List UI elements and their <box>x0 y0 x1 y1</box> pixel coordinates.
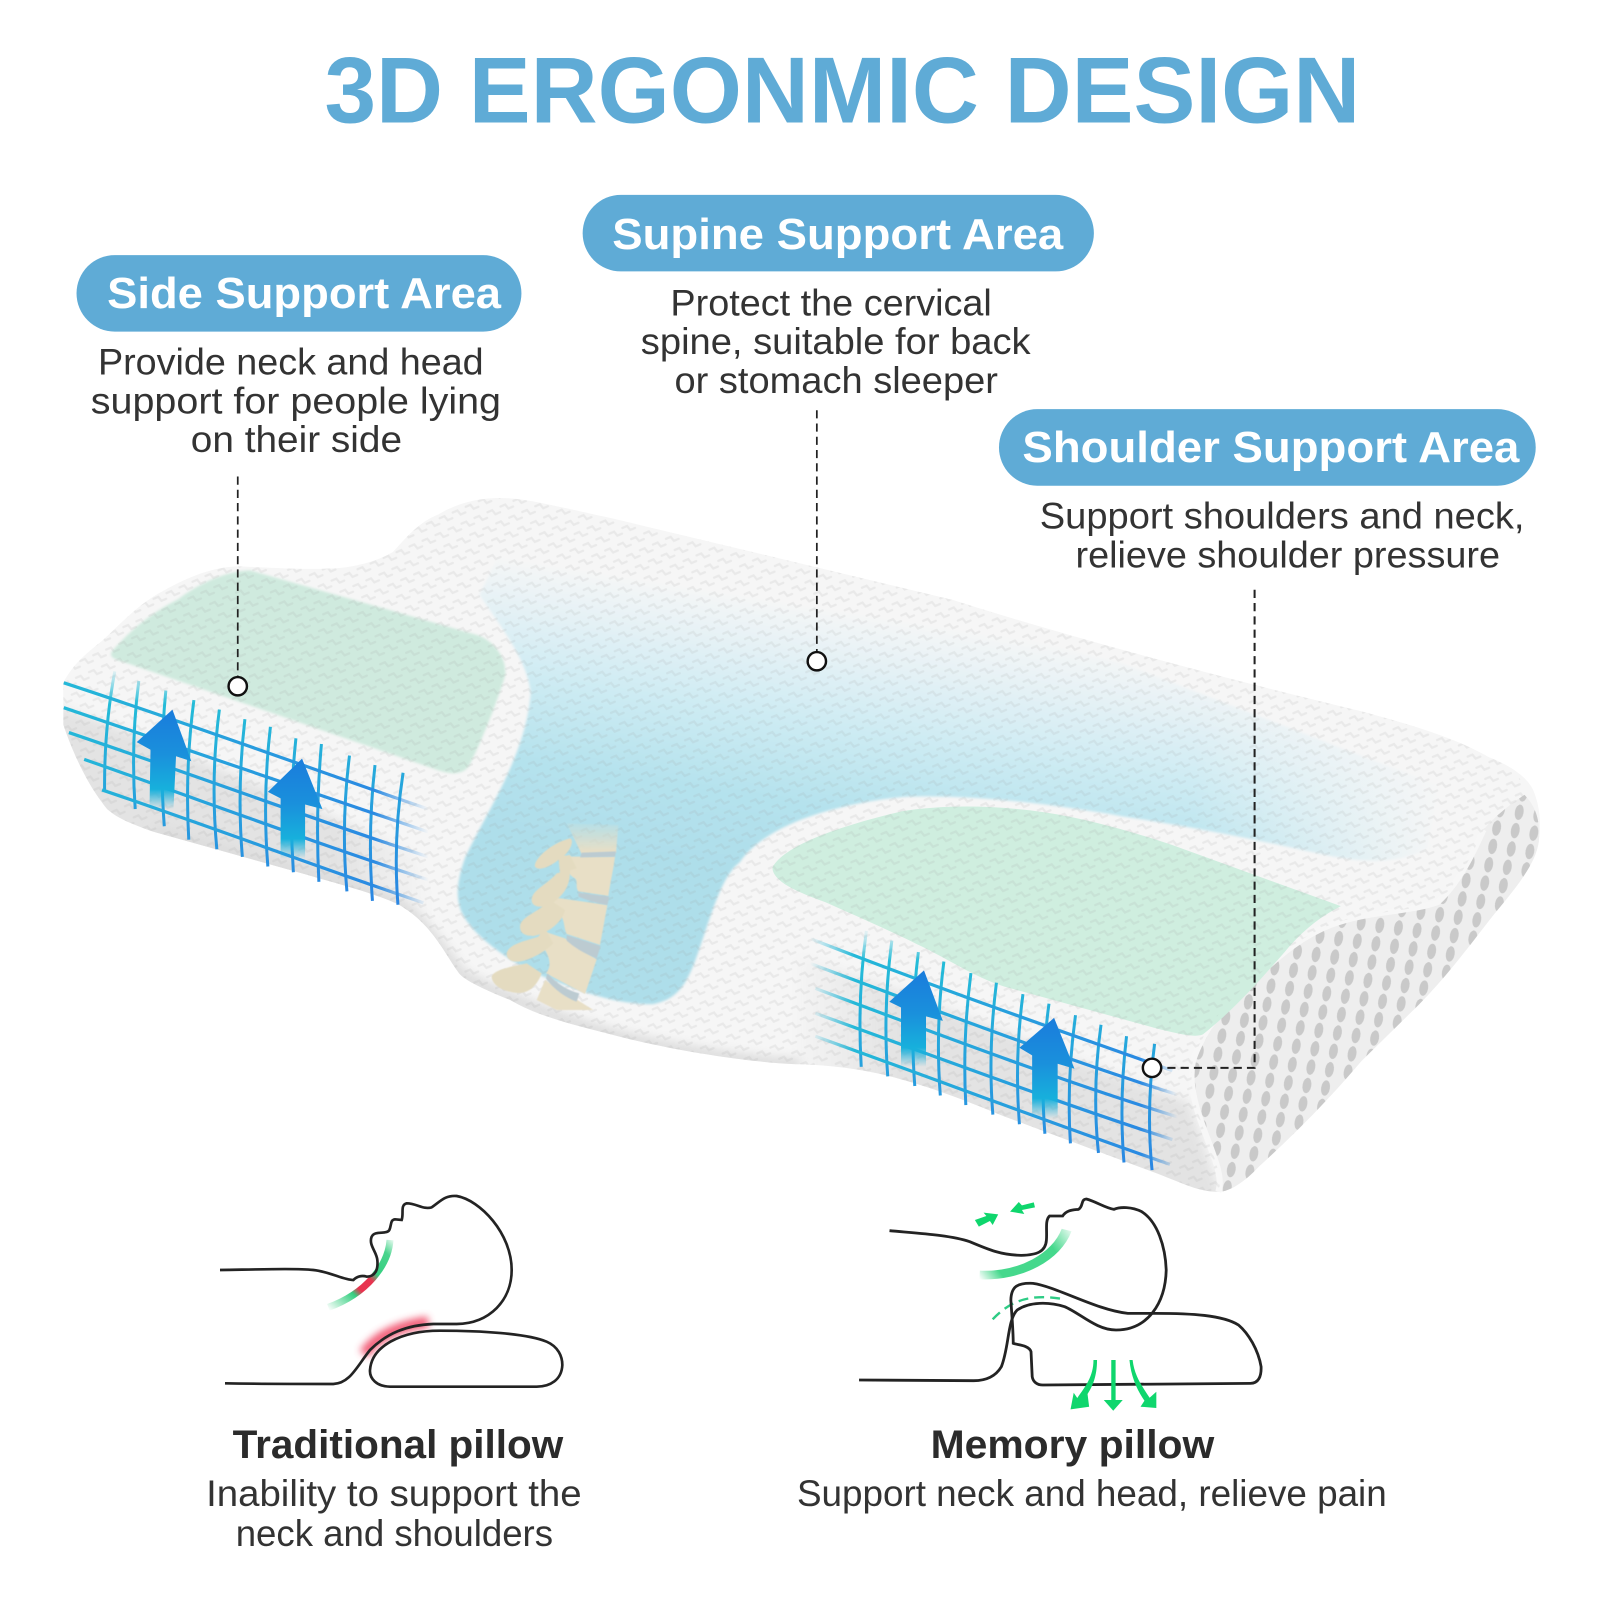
supine support description: or stomach sleeper <box>674 360 998 401</box>
traditional pillow caption <box>206 1423 582 1554</box>
callout: side support leader <box>229 477 247 695</box>
vertebral bodies <box>537 823 618 1010</box>
pressure glow <box>364 1322 428 1354</box>
left arrows <box>137 710 322 859</box>
supine support pill: Supine Support Area <box>612 210 1064 259</box>
shoulder support zone <box>772 806 1341 1036</box>
front faces and edge shading <box>51 704 1224 1204</box>
neck curve <box>980 1230 1067 1275</box>
traditional pillow caption: Inability to support the <box>206 1473 582 1514</box>
supine support zone <box>458 531 1449 1004</box>
memory pillow caption: Memory pillow <box>931 1423 1215 1467</box>
pillow outline <box>370 1331 562 1387</box>
side support description: Provide neck and head <box>98 341 484 382</box>
shoulder support pill <box>999 409 1536 486</box>
dashed spine line <box>993 1297 1065 1319</box>
callout: shoulder support leader <box>1143 590 1255 1077</box>
side support zone <box>111 570 505 773</box>
callout: supine support leader <box>808 410 826 676</box>
discs <box>546 851 616 1002</box>
left pressure grid <box>64 671 429 905</box>
head and body outline <box>859 1199 1166 1381</box>
shoulder support description: Support shoulders and neck, <box>1040 496 1524 537</box>
spinous processes <box>492 838 577 993</box>
memory pillow diagram <box>859 1199 1261 1411</box>
memory pillow caption <box>797 1423 1387 1514</box>
title: 3D ERGONMIC DESIGN <box>324 37 1360 142</box>
neck curve <box>328 1240 390 1307</box>
shoulder support pill: Shoulder Support Area <box>1022 423 1520 472</box>
knit texture <box>63 498 1524 1192</box>
supine support pill <box>583 195 1094 271</box>
supine support description: Protect the cervical <box>670 282 992 323</box>
traditional pillow caption: neck and shoulders <box>236 1513 553 1554</box>
side support pill <box>77 255 521 332</box>
head and body outline <box>220 1196 512 1384</box>
right pressure grid <box>810 931 1183 1170</box>
green arrows <box>975 1202 1156 1411</box>
traditional pillow diagram <box>220 1196 562 1387</box>
traditional pillow caption: Traditional pillow <box>233 1423 564 1467</box>
shoulder support description: relieve shoulder pressure <box>1076 534 1500 575</box>
right arrows <box>889 970 1074 1118</box>
mesh end panel <box>1191 795 1539 1192</box>
memory pillow caption: Support neck and head, relieve pain <box>797 1473 1387 1514</box>
side support pill: Side Support Area <box>107 269 502 318</box>
shoulder support description <box>1040 496 1524 575</box>
pillow outline <box>1011 1283 1261 1385</box>
pillow body <box>63 498 1540 1192</box>
spine illustration <box>492 823 618 1010</box>
side support description: support for people lying <box>91 380 501 421</box>
supine support description: spine, suitable for back <box>641 321 1031 362</box>
supine support description <box>641 282 1031 401</box>
side support description: on their side <box>191 419 402 460</box>
side support description <box>91 341 501 460</box>
pillow illustration <box>51 498 1540 1204</box>
